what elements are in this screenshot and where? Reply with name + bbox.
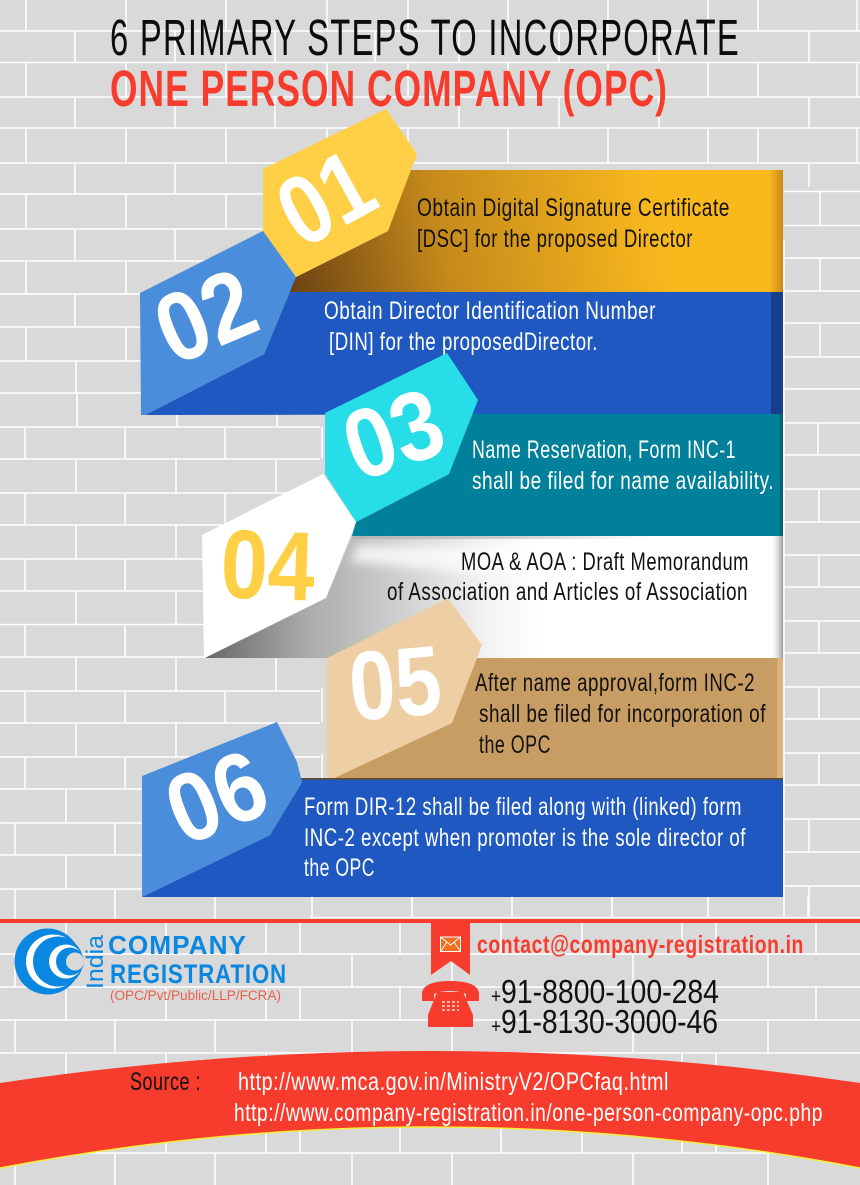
step 02 text <box>324 297 656 356</box>
panel band: white with grey fold <box>205 536 783 658</box>
phone numbers: +91-8800-100-284 <box>491 973 719 1010</box>
step 03 text: Name Reservation, Form INC-1 <box>472 436 736 464</box>
step 06 text: the OPC <box>304 854 375 882</box>
source links <box>234 1068 823 1127</box>
panel band: tan <box>332 658 783 779</box>
contact block <box>422 923 804 1040</box>
step 02 text: Obtain Director Identification Number <box>324 297 656 325</box>
step 04 text: of Association and Articles of Association <box>387 578 748 606</box>
step 05 text <box>475 669 766 759</box>
step 01 text: Obtain Digital Signature Certificate <box>417 194 730 222</box>
badge 06: 06 <box>150 728 282 866</box>
step 03 text: shall be filed for name availability. <box>472 467 774 495</box>
badge 05 <box>327 598 482 779</box>
step 05 text: shall be filed for incorporation of <box>479 700 766 728</box>
source links: http://www.mca.gov.in/MinistryV2/OPCfaq.html <box>238 1068 669 1096</box>
logo word: India: India <box>82 934 109 989</box>
source banner <box>0 1051 860 1168</box>
badge 05: 05 <box>344 624 446 742</box>
footer divider <box>0 919 860 923</box>
step 03 text <box>472 436 774 495</box>
step 05 text: After name approval,form INC-2 <box>475 669 755 697</box>
logo word: Registration: REGISTRATION <box>110 959 287 989</box>
step 04 panel <box>202 474 783 658</box>
phone numbers: +91-8130-3000-46 <box>491 1003 718 1040</box>
icon: mail ribbon <box>431 923 470 975</box>
step 02 text: [DIN] for the proposedDirector. <box>329 328 598 356</box>
badge 04: 04 <box>219 508 317 622</box>
badge 04 <box>202 474 356 658</box>
icon: telephone <box>422 981 479 1027</box>
banner curve <box>0 1051 860 1168</box>
step 06 text <box>304 793 746 882</box>
step 01 text <box>417 194 730 253</box>
step 05 text: the OPC <box>479 731 551 759</box>
step 06 panel <box>142 722 783 897</box>
step 05 panel <box>327 598 783 779</box>
panel band: blue <box>142 779 783 897</box>
step 01 panel <box>259 109 783 292</box>
panel band: yellow <box>289 170 783 292</box>
panel band: teal <box>352 414 783 536</box>
logo tagline: (OPC/Pvt/Public/LLP/FCRA) <box>110 988 281 1003</box>
panel band: blue <box>145 277 783 415</box>
step 03 panel <box>325 353 783 536</box>
step 04 text <box>387 548 749 606</box>
badge 01: 01 <box>259 127 392 268</box>
badge 02: 02 <box>139 246 272 386</box>
title <box>110 9 740 117</box>
step 04 text: MOA & AOA : Draft Memorandum <box>461 548 749 576</box>
logo word: Company: COMPANY <box>108 930 247 960</box>
step 01 text: [DSC] for the proposed Director <box>417 225 693 253</box>
step 02 panel <box>139 231 783 415</box>
source label: Source : <box>130 1068 201 1096</box>
logo: India Company Registration <box>14 928 287 1003</box>
phone numbers <box>491 973 719 1040</box>
badge 03: 03 <box>329 366 458 502</box>
icon: logo crescents <box>14 928 84 994</box>
